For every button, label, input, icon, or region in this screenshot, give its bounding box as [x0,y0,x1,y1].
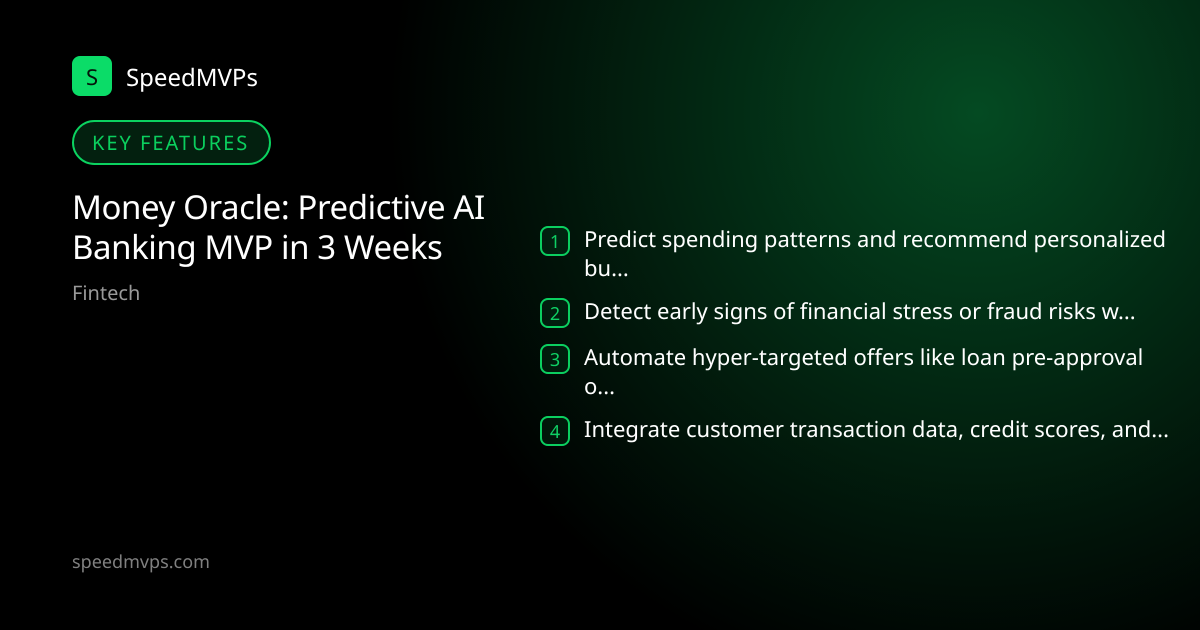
feature 3: 3 [550,348,560,372]
badge: key features [72,120,271,165]
feature 3 [540,342,1143,401]
feature 1 [540,224,1166,283]
feature 2: 2 [550,302,560,326]
feature 1: 1 [550,230,560,254]
feature 4: Integrate customer transaction data, credit scores, and... [584,414,1169,444]
feature 3: Automate hyper-targeted offers like loan pre-approval [584,342,1143,372]
feature 4: 4 [550,420,560,444]
logo mark: S [86,62,98,92]
title [72,184,485,269]
feature 2: Detect early signs of financial stress or fraud risks w... [584,296,1136,326]
badge: key features: KEY FEATURES [92,129,249,156]
feature 1: Predict spending patterns and recommend personalized [584,224,1166,254]
title: Money Oracle: Predictive AI [72,184,485,229]
feature 3: o... [584,371,615,401]
title: Banking MVP in 3 Weeks [72,224,442,269]
footer url: speedmvps.com [72,550,210,574]
feature 1: bu... [584,253,629,283]
logo mark [72,56,112,96]
category: Fintech [72,279,140,306]
brand name: SpeedMVPs [126,61,258,94]
